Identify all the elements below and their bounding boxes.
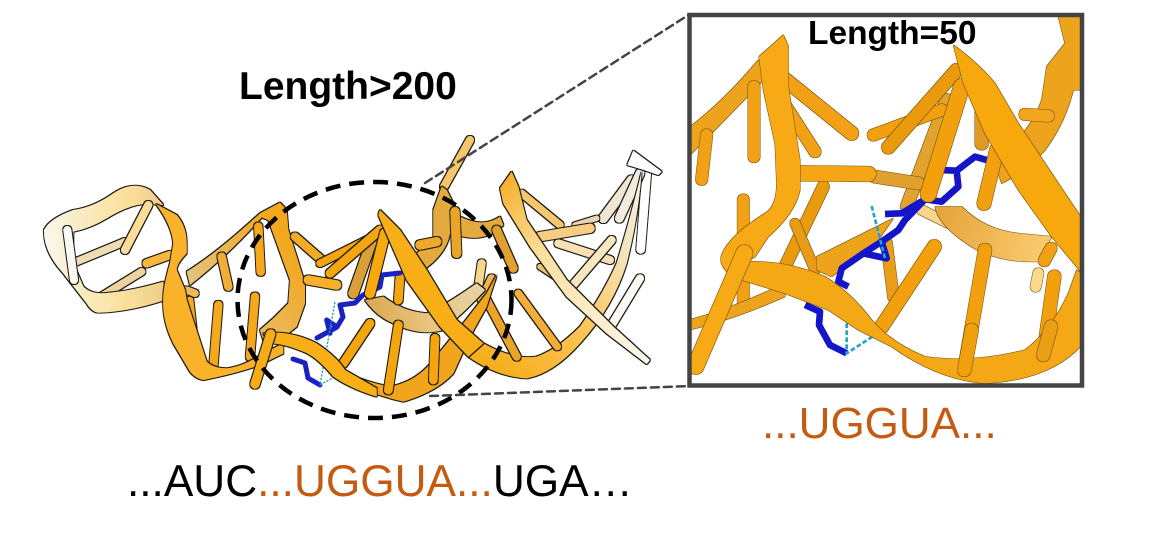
bases <box>320 230 435 390</box>
tan arc <box>922 210 948 223</box>
upper-right arc <box>992 17 1082 183</box>
right ribbon <box>953 45 1085 277</box>
right helix bases <box>522 193 560 225</box>
lower-left front ribbon <box>255 333 377 397</box>
central and right helix <box>293 140 662 402</box>
tan arc <box>478 263 482 287</box>
upper arc <box>444 140 470 187</box>
pale hairpin bases <box>77 242 163 303</box>
white end bases <box>641 173 647 249</box>
heading: Length>200: Length>200 <box>239 65 457 108</box>
lower bases <box>882 247 1054 370</box>
mid strand <box>187 203 305 340</box>
blue ligand <box>805 157 987 353</box>
lower arc <box>340 275 497 402</box>
crossing strand <box>156 204 283 380</box>
sequence: full length: ...AUC...UGGUA...UGA… <box>127 457 633 506</box>
central wedge band <box>817 218 893 277</box>
heading: Length=50: Length=50 <box>808 15 976 52</box>
left loop and strands <box>44 186 337 380</box>
lower ribbon <box>742 262 1085 383</box>
main front ribbon <box>378 210 483 357</box>
lower-left band <box>692 290 786 330</box>
magnifier circle <box>238 182 512 418</box>
upper-left arc <box>688 60 763 157</box>
inset border <box>690 15 1082 386</box>
zoom guide lines <box>425 14 690 396</box>
left twisted ribbon <box>721 35 800 273</box>
upper centre bases <box>873 70 997 203</box>
small blue ligand <box>293 273 400 385</box>
sequence: short: ...UGGUA... <box>762 399 997 448</box>
panel: zoomed length 50 inset <box>688 15 1085 386</box>
illustration: full-length RNA helix <box>44 140 662 402</box>
pale loop ribbon <box>44 186 165 313</box>
strand E <box>500 172 650 364</box>
hydrogen bonds <box>847 206 885 353</box>
central khaki stick <box>907 100 947 207</box>
right strand F <box>468 172 642 378</box>
inset structure <box>688 17 1085 383</box>
